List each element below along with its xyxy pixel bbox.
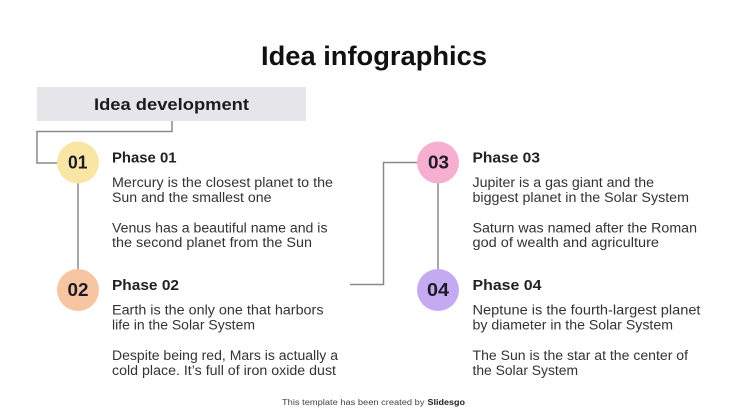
badge 01 [57,142,99,184]
text: phase 04 description: The Sun is the star at the center of [472,348,688,363]
text: phase 03 description: Saturn was named after the Roman [472,220,697,236]
badge 01: 01 [68,152,88,172]
text: phase 01 description: Sun and the smallest one [112,190,272,205]
text: phase 01 description: Venus has a beautiful name and is [112,220,328,236]
footer credit: This template has been created by [282,398,424,407]
text: phase 01 description [112,175,333,250]
text: phase 02 description: Earth is the only one that harbors [112,302,324,318]
text: phase 02 description: Despite being red, Mars is actually a [112,348,339,363]
footer credit [282,398,465,407]
heading: phase 03: Phase 03 [472,150,540,166]
text: phase 04 description: the Solar System [472,363,578,378]
panel: phase 01 [57,142,333,250]
panel: phase 02 [57,269,339,378]
footer credit: Slidesgo [428,398,465,407]
badge 03 [417,142,459,184]
text: phase 02 description: life in the Solar System [112,318,255,332]
text: phase 03 description [472,175,697,250]
heading: phase 02: Phase 02 [112,277,179,294]
heading: phase 04: Phase 04 [472,277,542,294]
heading: phase 01: Phase 01 [112,150,176,166]
text: phase 04 description: by diameter in the Solar System [472,318,673,332]
text: phase 04 description [472,302,701,378]
panel: idea development header [37,87,306,121]
text: phase 01 description: Mercury is the closest planet to the [112,175,333,190]
text: phase 02 description: cold place. It’s full of iron oxide dust [112,363,336,378]
connector: phase 03 to phase 04 [437,183,439,270]
text: phase 03 description: biggest planet in the Solar System [472,190,689,205]
text: phase 03 description: Jupiter is a gas giant and the [472,175,654,190]
panel: phase 04 [417,269,701,378]
text: phase 04 description: Neptune is the fourth-largest planet [472,302,701,318]
badge 02: 02 [68,280,88,300]
badge 03: 03 [428,152,449,172]
title: Idea infographics [261,41,487,71]
text: phase 01 description: the second planet from the Sun [112,235,312,250]
connector: phase 02 to phase 03 [350,162,418,284]
connector: header to phase 01 [37,121,172,163]
panel: idea development header: Idea development [94,95,249,114]
panel: phase 03 [417,142,697,250]
text: phase 02 description [112,302,339,378]
text: phase 03 description: god of wealth and agriculture [472,235,659,250]
connector: phase 01 to phase 02 [77,183,79,270]
badge 02 [57,269,99,311]
badge 04 [417,269,459,311]
badge 04: 04 [427,280,449,300]
